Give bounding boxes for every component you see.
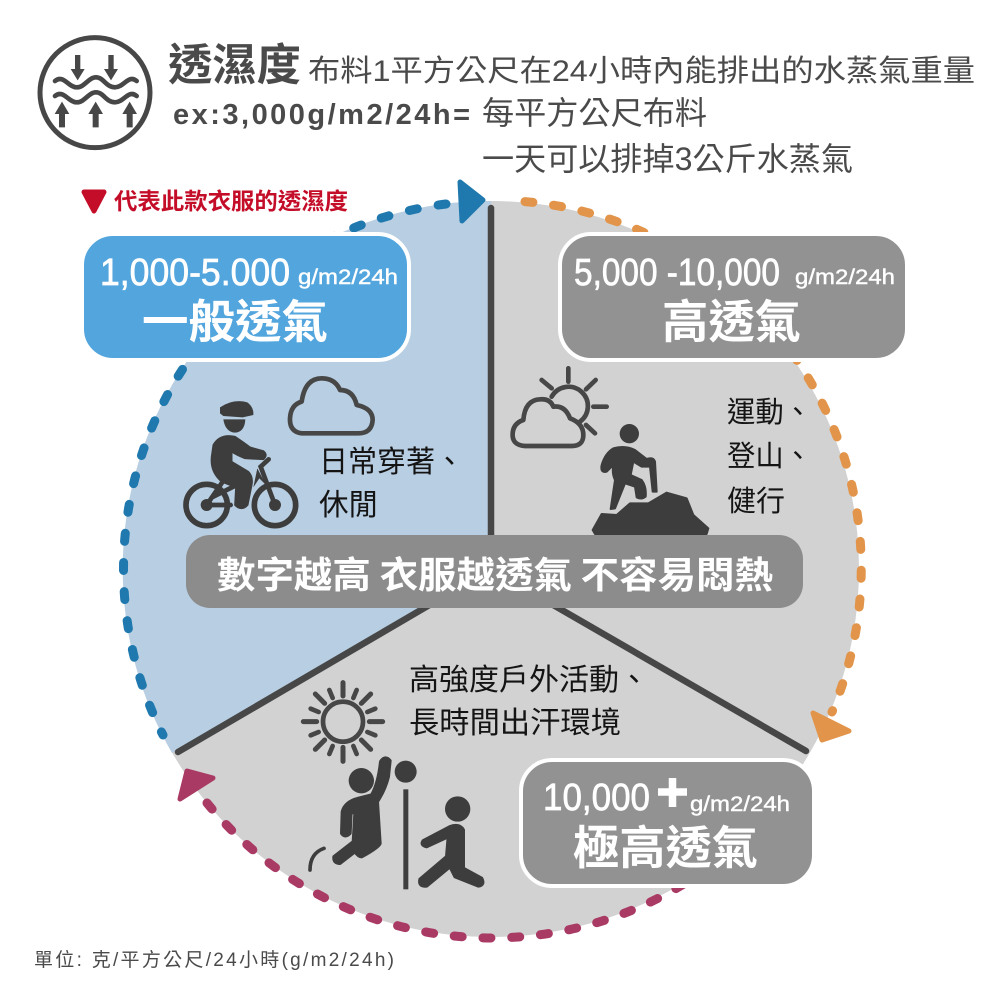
text: daily wear: 日常穿著、 — [319, 446, 464, 479]
panel: high breathability: 5,000 -10,000 — [574, 252, 780, 294]
text: high intensity outdoors — [409, 664, 649, 740]
example explanation: 每平方公尺布料 — [482, 95, 707, 131]
icon: sun — [303, 683, 383, 761]
panel: very high breathability: g/m2/24h — [690, 793, 790, 816]
arrow arc: crimson — [180, 771, 690, 938]
panel: high breathability — [560, 234, 907, 360]
text: sports and hiking — [727, 396, 812, 518]
legend: red marker: 代表此款衣服的透濕度 — [114, 188, 348, 214]
panel: very high breathability: 極高透氣 — [573, 812, 758, 878]
definition text: 布料1平方公尺在24小時內能排出的水蒸氣重量 — [308, 55, 975, 88]
center callout: 數字越高 衣服越透氣 不容易悶熱 — [217, 545, 773, 599]
example explanation: 一天可以排掉3公斤水蒸氣 — [482, 141, 853, 177]
text: daily wear — [319, 446, 464, 522]
panel: very high breathability: 10,000 — [543, 777, 650, 819]
arrow arc: blue — [124, 182, 483, 735]
example explanation — [482, 95, 853, 177]
center callout — [186, 535, 803, 608]
icon: moisture permeability — [40, 38, 150, 148]
pie chart — [123, 201, 859, 937]
icon: hiker on mountain — [593, 424, 708, 534]
panel: general breathability: g/m2/24h — [298, 266, 398, 289]
icon: partly cloudy — [513, 368, 607, 446]
text: sports and hiking: 登山、 — [727, 440, 812, 473]
panel: high breathability: 高透氣 — [662, 286, 801, 352]
footer: unit note: 單位: 克/平方公尺/24小時(g/m2/24h) — [34, 949, 394, 971]
text: high intensity outdoors: 長時間出汗環境 — [409, 707, 621, 740]
example formula: ex:3,000g/m2/24h= — [173, 99, 470, 131]
text: sports and hiking: 運動、 — [727, 396, 812, 429]
panel: high breathability: g/m2/24h — [795, 266, 895, 289]
icon: jumping and running figures — [310, 758, 483, 889]
panel: general breathability — [82, 234, 409, 360]
text: high intensity outdoors: 高強度戶外活動、 — [409, 664, 649, 697]
arrow arc: orange — [525, 202, 861, 740]
text: sports and hiking: 健行 — [727, 485, 785, 518]
panel: general breathability: 一般透氣 — [142, 286, 328, 352]
icon: cyclist — [186, 401, 296, 526]
panel: general breathability: 1,000-5.000 — [100, 252, 290, 294]
title: 透濕度 — [168, 29, 301, 93]
panel: very high breathability — [521, 760, 814, 886]
icon: cloud — [290, 378, 373, 433]
text: daily wear: 休閒 — [319, 489, 378, 522]
